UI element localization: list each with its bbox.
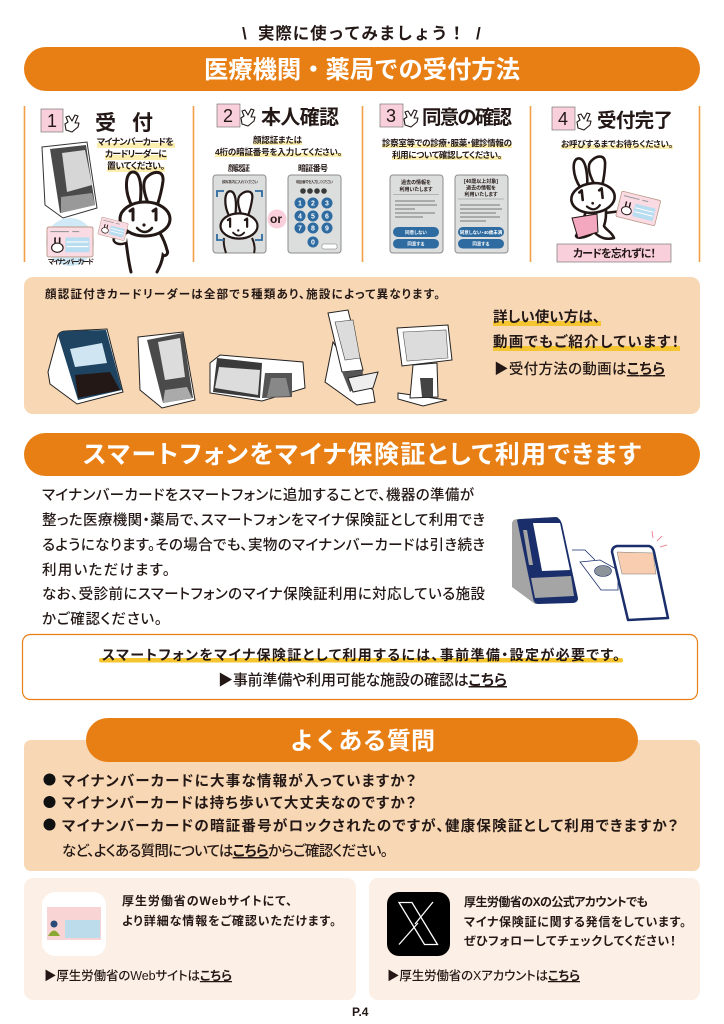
card: MHLW website bbox=[24, 878, 356, 1000]
reader 2: white bbox=[138, 332, 195, 408]
FAQ questions: など、よくある質問についてはこちらからご確認ください。 bbox=[62, 842, 388, 860]
intro heading: 実際に使ってみましょう！ bbox=[258, 24, 465, 43]
text block: smartphone explanation: 整った医療機関・薬局で、スマートフォンをマイナ保険証として利用でき bbox=[42, 512, 485, 529]
step 2: 3 bbox=[325, 200, 329, 208]
panel: four reception steps bbox=[24, 104, 700, 272]
FAQ questions: マイナンバーカードに大事な情報が入っていますか？ bbox=[62, 772, 416, 790]
step 2: 2 bbox=[311, 200, 315, 208]
callout: advance setup required bbox=[22, 634, 698, 700]
text block: smartphone explanation bbox=[42, 486, 486, 628]
callout: advance setup required: スマートフォンをマイナ保険証として利用するには、事前準備・設定が必要です。 bbox=[102, 647, 620, 663]
callout: advance setup required: ▶事前準備や利用可能な施設の確認はこちら bbox=[218, 672, 507, 689]
step 2: 顔認証または bbox=[253, 135, 303, 145]
card: MHLW website: 厚生労働省のWebサイトにて、 bbox=[122, 893, 292, 908]
card: MHLW X account: 厚生労働省のXの公式アカウントでも bbox=[464, 894, 648, 909]
step 4: 受付完了 bbox=[597, 109, 673, 132]
step 2: 2 bbox=[223, 106, 233, 126]
video callout: ▶受付方法の動画はこちら bbox=[494, 360, 665, 378]
step 3: 同意する bbox=[407, 240, 425, 248]
FAQ questions: マイナンバーカードは持ち歩いて大丈夫なのですか？ bbox=[62, 794, 416, 812]
step 2: 0 bbox=[311, 240, 315, 246]
step 1: 受 付 bbox=[95, 112, 153, 135]
video callout: 動画でもご紹介しています！ bbox=[493, 333, 679, 351]
step 2: or bbox=[270, 212, 282, 226]
step 2: 4桁の暗証番号を入力してください。 bbox=[215, 147, 342, 157]
step 4: お呼びするまでお待ちください。 bbox=[561, 139, 673, 149]
step 2: 9 bbox=[325, 226, 329, 232]
text block: smartphone explanation: マイナンバーカードをスマートフォンに追加することで、機器の準備が bbox=[42, 486, 475, 504]
step 3: 利用について確認してください。 bbox=[392, 150, 502, 160]
step 1: 置いてください。 bbox=[107, 161, 165, 171]
card: MHLW X account bbox=[369, 878, 700, 1000]
intro heading: \ bbox=[242, 24, 247, 43]
step 2 bbox=[213, 104, 342, 253]
step 3: 3 bbox=[386, 106, 396, 126]
step 1: 1 bbox=[47, 111, 57, 131]
step 2: 本人確認 bbox=[261, 106, 339, 129]
video callout bbox=[493, 308, 680, 378]
text block: smartphone explanation: かご確認ください。 bbox=[42, 610, 162, 628]
step 2: 顔写真内に入れてください bbox=[222, 179, 259, 184]
step 2: 顔認証 bbox=[228, 163, 250, 173]
card: MHLW website: より詳細な情報をご確認いただけます。 bbox=[122, 913, 336, 928]
banner: reception method: 医療機関・薬局での受付方法 bbox=[204, 57, 520, 84]
reader 3: desktop bbox=[210, 355, 305, 401]
step 2: 5 bbox=[311, 214, 315, 220]
banner: smartphone as My Number insurance card bbox=[24, 433, 700, 476]
step 3: 同意しない bbox=[405, 229, 427, 236]
step 2: 暗証番号を入力してください bbox=[296, 179, 334, 184]
page number: P.4 bbox=[352, 1005, 369, 1019]
FAQ banner bbox=[86, 718, 638, 762]
step 4 bbox=[552, 107, 673, 262]
card: MHLW X account: マイナ保険証に関する発信をしています。 bbox=[464, 914, 686, 929]
step 3: 同意しない・40歳未満 bbox=[460, 229, 503, 236]
text block: smartphone explanation: るようになります。その場合でも、実物のマイナンバーカードは引き続き bbox=[42, 536, 485, 554]
panel: face-recognition card readers bbox=[24, 277, 700, 414]
step 2: 6 bbox=[325, 214, 329, 220]
step 2: 8 bbox=[311, 226, 315, 232]
icon: X logo bbox=[387, 892, 450, 956]
step 4: 4 bbox=[558, 109, 568, 129]
banner: reception method bbox=[24, 47, 700, 91]
card: MHLW website: ▶厚生労働省のWebサイトはこちら bbox=[44, 968, 232, 983]
step 1: マイナンバーカード bbox=[48, 258, 94, 266]
card: MHLW X account: ▶厚生労働省のXアカウントはこちら bbox=[387, 968, 580, 983]
text block: smartphone explanation: 利用いただけます。 bbox=[42, 562, 170, 579]
text block: smartphone explanation: なお、受診前にスマートフォンのマイナ保険証利用に対応している施設 bbox=[42, 585, 486, 603]
step 3: 診察室等での診療・服薬・健診情報の bbox=[382, 138, 512, 148]
step 3: 過去の情報を bbox=[466, 184, 496, 192]
reader 4: tablet stand bbox=[325, 310, 378, 405]
reader 1: navy bbox=[48, 329, 123, 404]
step 3: 過去の情報を bbox=[401, 179, 431, 186]
card: MHLW X account: ぜひフォローしてチェックしてください！ bbox=[464, 934, 676, 948]
step 3: 同意の確認 bbox=[422, 107, 512, 129]
step 2: 7 bbox=[298, 226, 302, 232]
step 2: 暗証番号 bbox=[298, 163, 328, 173]
FAQ banner: よくある質問 bbox=[290, 728, 435, 755]
step 1: カードリーダーに bbox=[105, 148, 167, 159]
intro heading: / bbox=[476, 24, 481, 43]
step 1 bbox=[41, 109, 175, 272]
reader 5: kiosk bbox=[397, 325, 452, 406]
step 1: マイナンバーカードを bbox=[97, 137, 174, 147]
step 3: [40歳以上対象] bbox=[464, 178, 498, 185]
FAQ questions bbox=[44, 772, 678, 860]
panel: FAQ bbox=[24, 718, 700, 871]
panel: face-recognition card readers: 顔認証付きカードリーダーは全部で５種類あり、施設によって異なります。 bbox=[45, 287, 440, 301]
step 4: カードを忘れずに！ bbox=[573, 246, 656, 260]
step 2: 1 bbox=[298, 200, 302, 208]
icon: sample card bbox=[42, 892, 106, 956]
step 3 bbox=[380, 104, 512, 253]
banner: smartphone as My Number insurance card: スマートフォンをマイナ保険証として利用できます bbox=[83, 441, 641, 469]
step 3: 同意する bbox=[472, 240, 490, 248]
step 3: 利用いたします bbox=[399, 186, 433, 193]
FAQ questions: マイナンバーカードの暗証番号がロックされたのですが、健康保険証として利用できますか？ bbox=[62, 817, 678, 835]
illustration: smartphone on reader bbox=[512, 517, 668, 620]
step 3: 利用いたします bbox=[464, 191, 498, 198]
video callout: 詳しい使い方は、 bbox=[493, 308, 600, 326]
step 2: 4 bbox=[298, 214, 302, 220]
